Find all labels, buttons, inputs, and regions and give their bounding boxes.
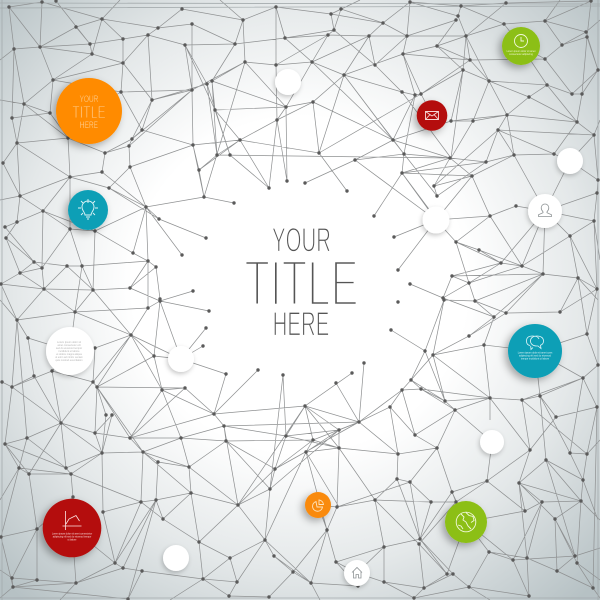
text block: Lorem ipsum dolor sit (57, 341, 81, 344)
text block: amet consectetur elit (57, 344, 81, 347)
icon: house (352, 568, 362, 578)
text block: et dolore magna aliqua (56, 353, 82, 356)
circle: green clock (502, 27, 540, 65)
text block (55, 341, 83, 362)
circle: white user (528, 194, 562, 228)
title line: here: HERE (273, 305, 329, 343)
title line: your: YOUR (272, 221, 331, 259)
circle: green globe (445, 501, 487, 543)
icon: speech bubbles (526, 336, 544, 350)
icon: lightbulb (78, 199, 98, 219)
text block: ut labore (68, 538, 77, 542)
circle: blank lower right (480, 430, 504, 454)
text block: sed do eiusmod tempor (56, 347, 82, 350)
text block: incididunt ut labore (58, 350, 80, 353)
circle: red mail (417, 100, 447, 131)
text block: tempor incididunt ut labore (521, 358, 550, 360)
circle: orange title: HERE (80, 120, 98, 130)
circle: blank right (557, 148, 583, 174)
icon: globe (456, 512, 476, 532)
circle: teal chat (508, 324, 562, 378)
icon: user (538, 204, 552, 216)
text block: adipiscing elit sed do eiusmod tempor (53, 536, 91, 538)
circle: white home (344, 560, 370, 586)
icon: line chart (62, 511, 82, 530)
title line: title: TITLE (244, 246, 359, 320)
circle: red chart (43, 499, 101, 557)
text block: adipiscing elit sed do eiusmod (519, 354, 552, 358)
circle: orange pie chart (305, 492, 331, 518)
circle: orange title (56, 78, 122, 144)
circle: orange title: TITLE (72, 103, 106, 123)
title (244, 221, 359, 343)
text block (518, 352, 553, 360)
icon: clock (514, 34, 528, 48)
text block: quis nostrud exercitation (55, 359, 83, 362)
text block (52, 532, 92, 542)
circle: blank center left (168, 346, 194, 372)
circle: white text (46, 327, 94, 375)
circle: blank bottom (163, 545, 189, 571)
text block: Lorem ipsum dolor sit amet cons (518, 352, 553, 354)
text block: Lorem ipsum dolor sit amet (507, 50, 536, 53)
circle: green clock: consectetur adipiscing (509, 53, 533, 56)
circle: blank top (275, 69, 301, 95)
circle: blank center right (422, 206, 450, 234)
icon: pie chart (313, 500, 324, 511)
icon: envelope (426, 112, 438, 120)
circle: teal lightbulb (68, 190, 108, 230)
circle: orange title: YOUR (80, 94, 98, 104)
text block: ut enim ad minim veniam (55, 356, 83, 359)
text block: Lorem ipsum dolor sit amet consectetur (52, 532, 92, 536)
